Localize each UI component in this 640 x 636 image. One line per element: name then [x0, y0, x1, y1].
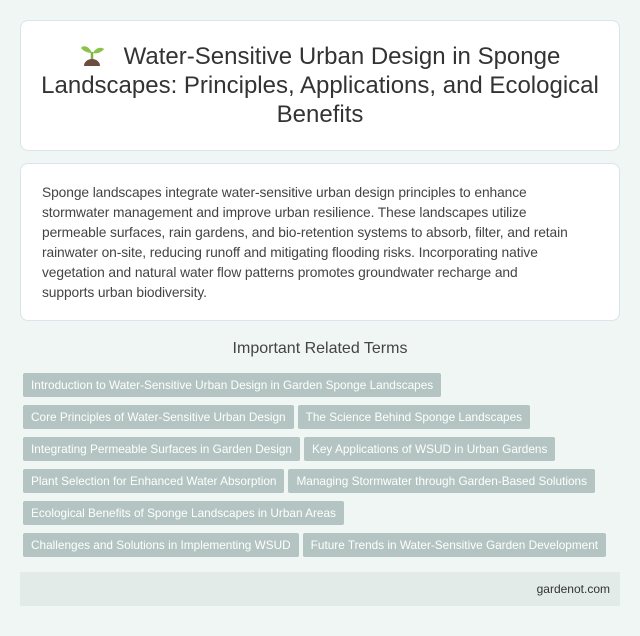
tags list: Ecological Benefits of Sponge Landscapes in Urban Areas	[31, 506, 336, 520]
description card: vegetation and natural water flow patterns promotes groundwater recharge and	[42, 265, 518, 280]
description card: permeable surfaces, rain gardens, and bio-retention systems to absorb, filter, and retain	[42, 225, 568, 240]
description card: rainwater on-site, reducing runoff and mitigating flooding risks. Incorporating native	[42, 245, 538, 260]
description card: supports urban biodiversity.	[42, 285, 207, 300]
tags list	[23, 373, 606, 557]
tags list: Key Applications of WSUD in Urban Gardens	[312, 442, 547, 456]
description card: Sponge landscapes integrate water-sensitive urban design principles to enhance	[42, 185, 527, 200]
description card: stormwater management and improve urban resilience. These landscapes utilize	[42, 205, 526, 220]
tags list: Future Trends in Water-Sensitive Garden Development	[311, 538, 598, 552]
tags list: Managing Stormwater through Garden-Based Solutions	[296, 474, 587, 488]
tags list: The Science Behind Sponge Landscapes	[306, 410, 522, 424]
title card	[20, 20, 620, 151]
heading: related terms: Important Related Terms	[233, 340, 407, 357]
tags list: Plant Selection for Enhanced Water Absorption	[31, 474, 276, 488]
icon: sprout	[81, 46, 104, 66]
footer	[20, 572, 620, 606]
tags list: Core Principles of Water-Sensitive Urban Design	[31, 410, 286, 424]
tags list: Introduction to Water-Sensitive Urban Design in Garden Sponge Landscapes	[31, 378, 433, 392]
tags list: Integrating Permeable Surfaces in Garden Design	[31, 442, 292, 456]
description card	[20, 163, 620, 321]
tags list: Challenges and Solutions in Implementing WSUD	[31, 538, 291, 552]
footer: gardenot.com	[537, 582, 610, 596]
title card: Water-Sensitive Urban Design in Sponge Landscapes: Principles, Applications, and Ecological Benefits	[41, 43, 599, 128]
